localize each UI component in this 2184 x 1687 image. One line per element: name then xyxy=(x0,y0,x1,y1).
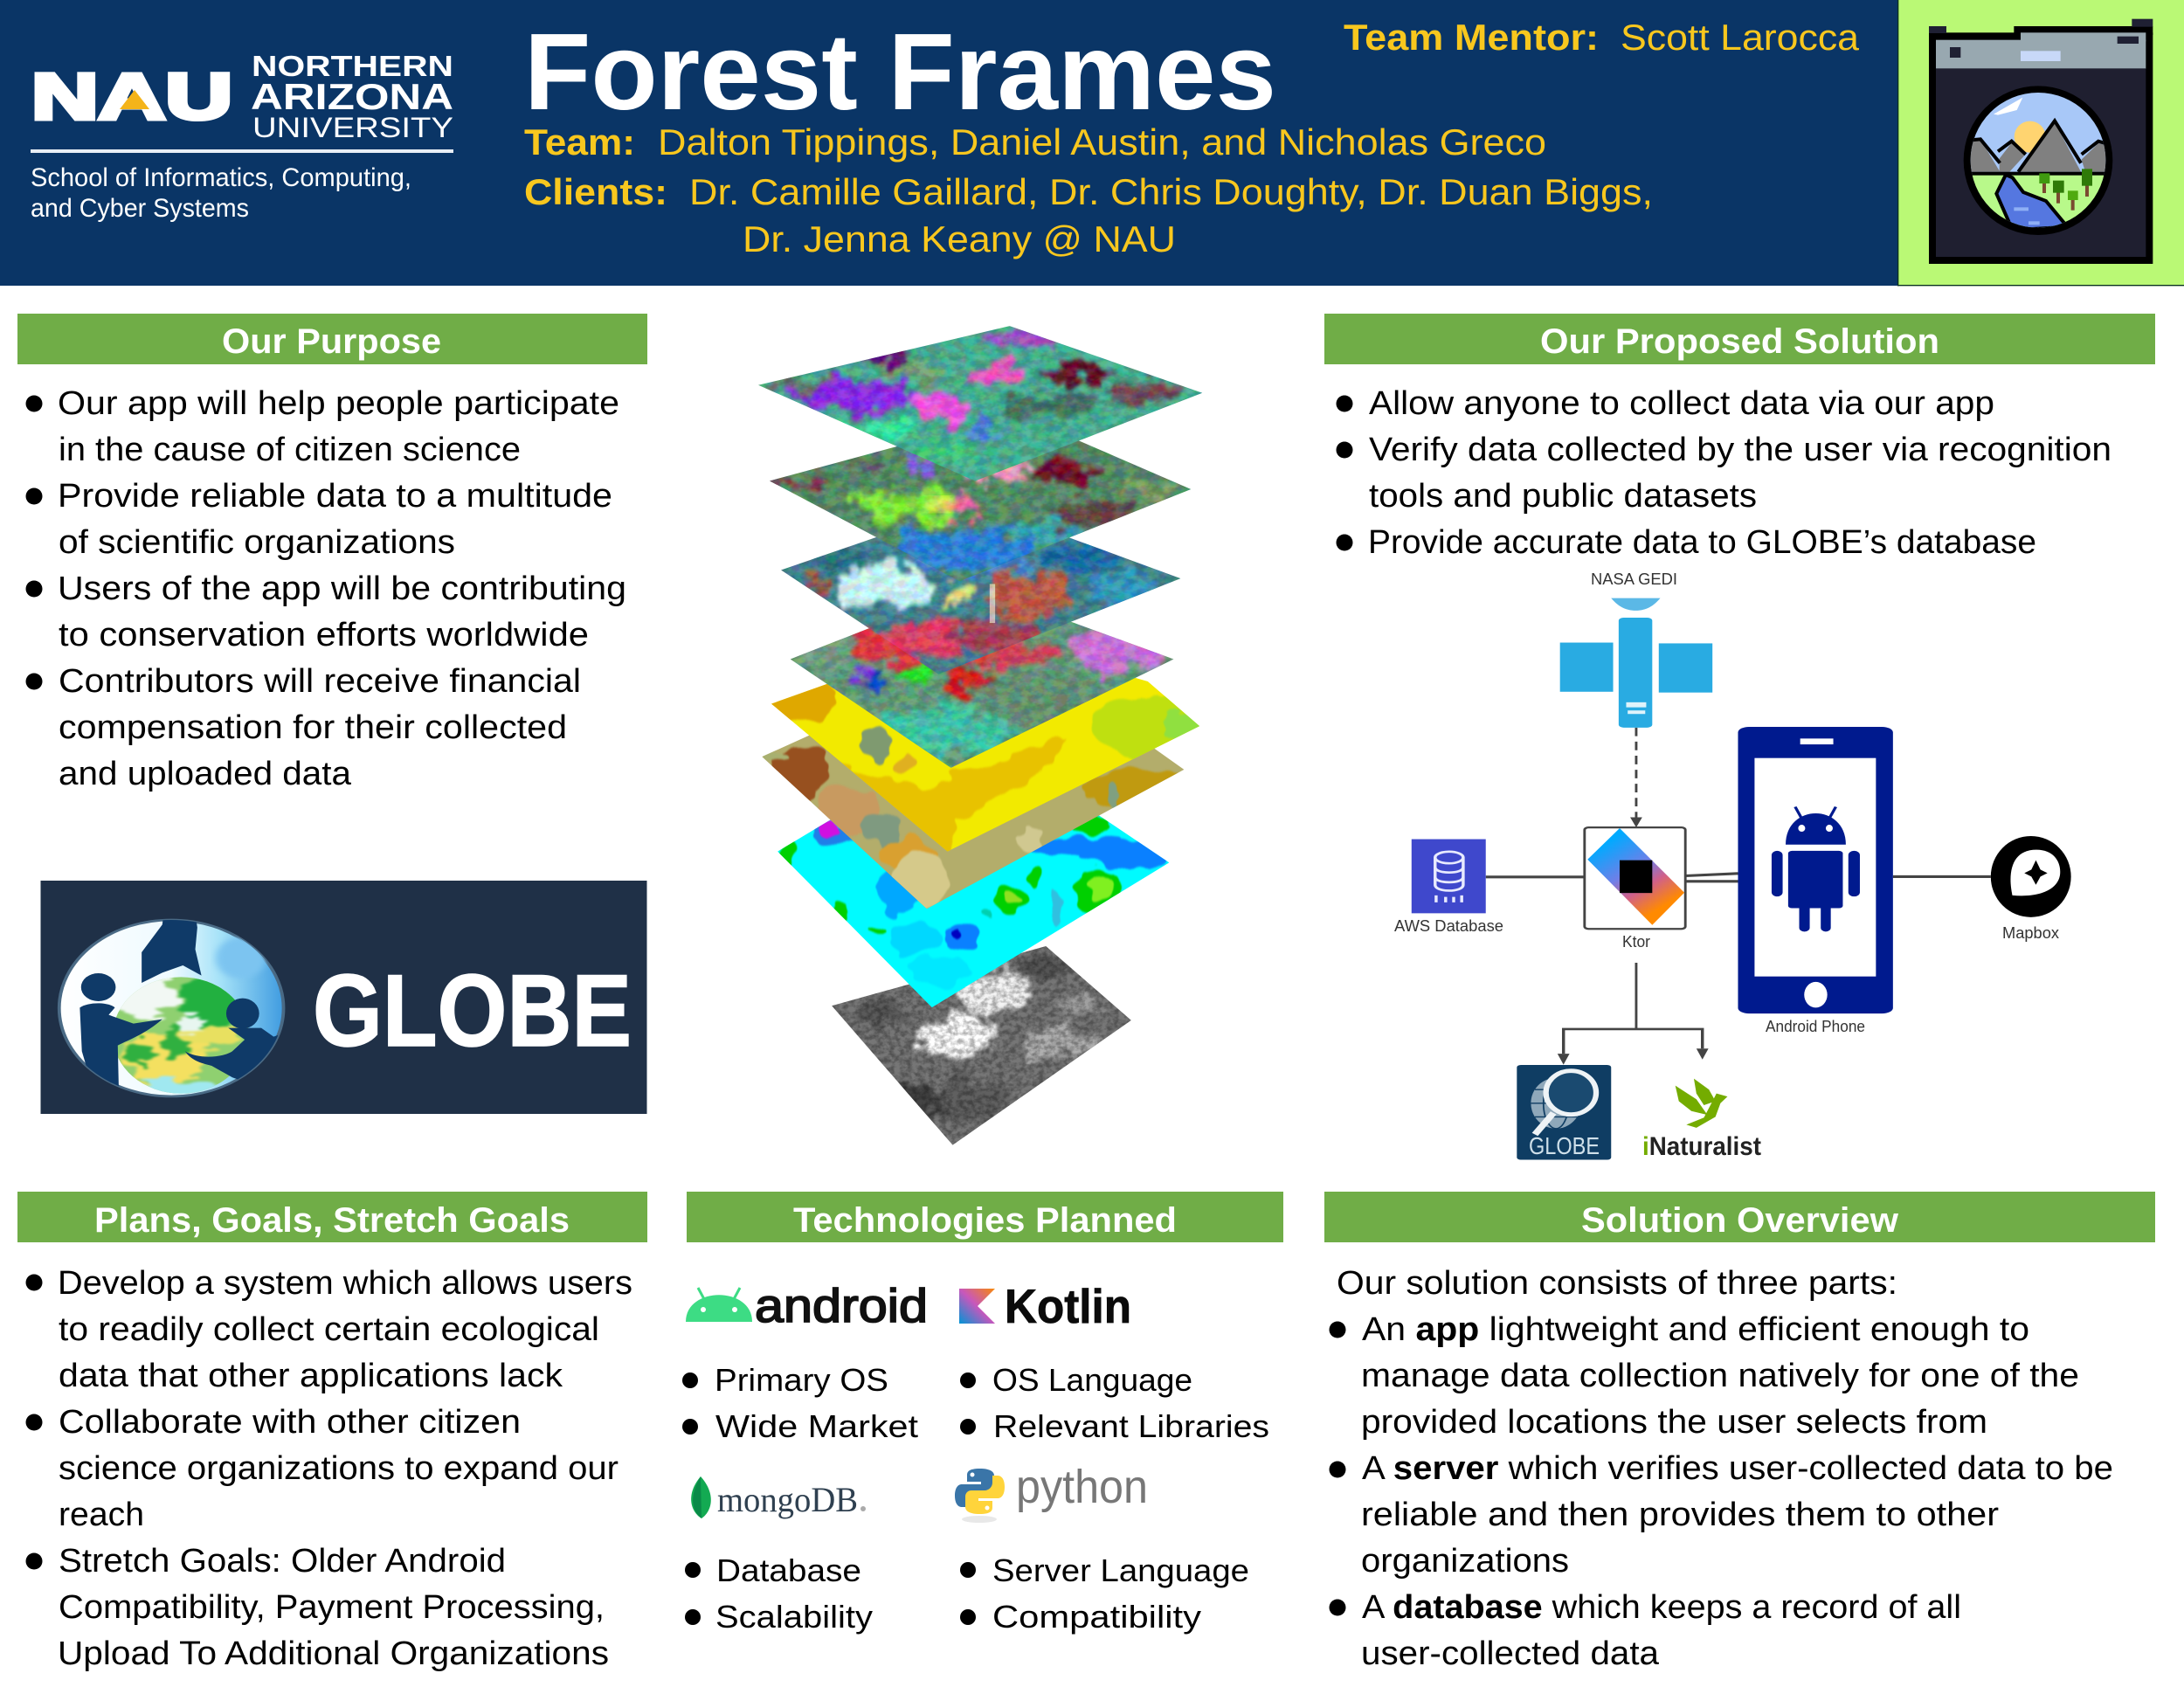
NAU logo: NAU xyxy=(31,60,232,133)
text block: android bullets: Primary OS xyxy=(715,1362,888,1398)
panel: plans, goals, stretch goals xyxy=(17,1192,647,1672)
icon: Mapbox xyxy=(1991,836,2071,917)
text block: plans bullets: to readily collect certain ecological xyxy=(59,1311,599,1348)
text block: plans bullets: science organizations to expand our xyxy=(59,1450,619,1487)
layer: cyan xyxy=(778,816,1169,1007)
NAU logo: UNIVERSITY xyxy=(252,112,453,143)
text block: overview: A database which keeps a record of all xyxy=(1362,1589,1961,1626)
text block: python bullets: Server Language xyxy=(992,1552,1249,1588)
text block: solution bullets xyxy=(1337,385,2111,561)
text block: mongodb bullets: Scalability xyxy=(715,1599,873,1635)
text block: overview: organizations xyxy=(1361,1543,1569,1580)
team mentor: Scott Larocca xyxy=(1621,17,1860,58)
text block: overview: reliable and then provides them to other xyxy=(1361,1497,1999,1533)
chart: architecture diagram: Ktor xyxy=(1622,933,1650,951)
text block: android bullets: Wide Market xyxy=(715,1408,918,1444)
text block: purpose bullets: and uploaded data xyxy=(59,756,352,792)
icon: GLOBE banner logo: GLOBE xyxy=(313,953,632,1068)
text block: overview: provided locations the user selects from xyxy=(1361,1404,1987,1441)
chart: stacked map layers xyxy=(757,325,1210,1147)
text block: overview xyxy=(1330,1265,2113,1672)
chart: architecture diagram: iNaturalist xyxy=(1642,1132,1761,1161)
text block: plans bullets: Develop a system which allows users xyxy=(58,1265,632,1302)
NAU logo xyxy=(31,50,453,223)
icon: AWS database xyxy=(1412,840,1486,913)
text block: plans bullets: data that other applications lack xyxy=(59,1358,563,1394)
text block: purpose bullets: Contributors will receive financial xyxy=(59,663,581,700)
icon: android logo xyxy=(686,1280,928,1332)
team line: Team: xyxy=(524,121,635,162)
text block: plans bullets: Stretch Goals: Older Android xyxy=(59,1543,506,1580)
text block: plans bullets xyxy=(26,1265,632,1672)
NAU logo: and Cyber Systems xyxy=(31,194,249,223)
clients lines: Clients: xyxy=(524,171,667,212)
text block: kotlin bullets xyxy=(960,1362,1269,1444)
text block: plans bullets: reach xyxy=(59,1497,144,1533)
chart: architecture diagram: GLOBE xyxy=(1529,1132,1600,1159)
text block: kotlin bullets: OS Language xyxy=(992,1362,1192,1398)
text block: purpose bullets xyxy=(26,385,626,792)
icon: python logo: python xyxy=(1016,1461,1148,1513)
text block: kotlin bullets: Relevant Libraries xyxy=(993,1408,1269,1444)
icon: android logo: android xyxy=(755,1280,928,1332)
text block: solution bullets: Allow anyone to collect data via our app xyxy=(1369,385,1994,422)
icon: kotlin logo: Kotlin xyxy=(1005,1279,1131,1333)
chart: architecture diagram: AWS Database xyxy=(1394,917,1503,935)
panel: solution overview xyxy=(1324,1192,2155,1672)
text block: purpose bullets: compensation for their collected xyxy=(59,709,567,746)
layer: yellow xyxy=(771,678,1199,851)
diagram shapes xyxy=(1412,598,2071,1160)
text block: plans bullets: Upload To Additional Organizations xyxy=(58,1635,609,1672)
text block: purpose bullets: to conservation efforts worldwide xyxy=(59,617,589,653)
icon: satellite xyxy=(1560,598,1712,728)
clients lines: Dr. Camille Gaillard, Dr. Chris Doughty, Dr. Duan Biggs, xyxy=(689,171,1653,212)
heading: technologies: Technologies Planned xyxy=(793,1201,1177,1240)
text block: python bullets xyxy=(960,1552,1249,1635)
icon: kotlin logo xyxy=(959,1279,1131,1333)
text block: solution bullets: Verify data collected by the user via recognition xyxy=(1369,432,2111,468)
text block: plans bullets: Compatibility, Payment Processing, xyxy=(59,1589,605,1626)
text block: overview: manage data collection natively for one of the xyxy=(1361,1358,2079,1394)
icon: Ktor xyxy=(1585,827,1685,929)
icon: GLOBE tile xyxy=(1517,1065,1611,1160)
NAU logo: School of Informatics, Computing, xyxy=(31,163,411,192)
text block: purpose bullets: Our app will help people participate xyxy=(58,385,619,422)
text block: purpose bullets: in the cause of citizen science xyxy=(59,432,521,468)
text block: overview: user-collected data xyxy=(1361,1635,1660,1672)
header band xyxy=(0,0,1897,286)
heading: technologies xyxy=(687,1192,1283,1242)
panel: our proposed solution xyxy=(1324,314,2155,561)
arrowheads xyxy=(1558,818,1709,1065)
layer: false colour blue xyxy=(781,537,1181,674)
team mentor: Team Mentor: xyxy=(1344,17,1599,58)
heading: our purpose: Our Purpose xyxy=(222,322,441,361)
layer: false colour red xyxy=(791,622,1174,768)
heading: solution overview xyxy=(1324,1192,2155,1242)
icon: iNaturalist bird xyxy=(1676,1079,1727,1128)
text block: solution bullets: tools and public datasets xyxy=(1369,478,1757,515)
chart: architecture diagram: Mapbox xyxy=(2002,924,2059,942)
text block: plans bullets: Collaborate with other citizen xyxy=(59,1404,521,1441)
heading: solution overview: Solution Overview xyxy=(1581,1201,1899,1240)
icon: python logo xyxy=(955,1461,1148,1523)
panel: technologies planned xyxy=(682,1192,1283,1635)
layer: false colour green xyxy=(770,440,1191,582)
text block: mongodb bullets xyxy=(685,1552,873,1635)
layer: tan soil xyxy=(762,736,1185,909)
connector lines xyxy=(1486,728,1991,1054)
chart: architecture diagram xyxy=(1394,570,2071,1161)
text block: purpose bullets: of scientific organizations xyxy=(59,524,455,561)
heading: plans xyxy=(17,1192,647,1242)
text block: python bullets: Compatibility xyxy=(992,1599,1201,1635)
panel: our purpose xyxy=(17,314,647,792)
layer: grayscale xyxy=(830,944,1134,1147)
team line: Dalton Tippings, Daniel Austin, and Nicholas Greco xyxy=(658,121,1546,162)
layer: false colour purple xyxy=(757,325,1203,484)
text block: purpose bullets: Provide reliable data to a multitude xyxy=(58,478,612,515)
NAU logo: ARIZONA xyxy=(251,76,453,117)
text block: mongodb bullets: Database xyxy=(716,1552,861,1588)
title: Forest Frames xyxy=(524,12,1276,133)
clients lines: Dr. Jenna Keany @ NAU xyxy=(743,218,1176,259)
text block: overview: A server which verifies user-collected data to be xyxy=(1362,1450,2113,1487)
icon: GLOBE banner logo xyxy=(40,881,646,1114)
heading: our proposed solution: Our Proposed Solution xyxy=(1540,322,1939,361)
chart: architecture diagram: Android Phone xyxy=(1766,1018,1865,1035)
clients lines xyxy=(524,171,1653,259)
diagram labels: NASA GEDI xyxy=(1591,570,1677,588)
icon: android phone xyxy=(1738,727,1893,1013)
text block: overview: Our solution consists of three parts: xyxy=(1337,1265,1897,1302)
icon: mongodb logo: mongoDB xyxy=(717,1480,858,1519)
text block: purpose bullets: Users of the app will be contributing xyxy=(58,570,626,607)
heading: plans: Plans, Goals, Stretch Goals xyxy=(94,1201,570,1240)
text block: overview: An app lightweight and efficient enough to xyxy=(1362,1311,2029,1348)
NAU logo: NORTHERN xyxy=(252,50,453,82)
team mentor xyxy=(1344,17,1860,58)
icon: app logo pixel camera xyxy=(1897,0,2184,286)
heading: our purpose xyxy=(17,314,647,364)
text block: android bullets xyxy=(682,1362,918,1444)
heading: our proposed solution xyxy=(1324,314,2155,364)
text block: solution bullets: Provide accurate data to GLOBE’s database xyxy=(1368,524,2036,561)
